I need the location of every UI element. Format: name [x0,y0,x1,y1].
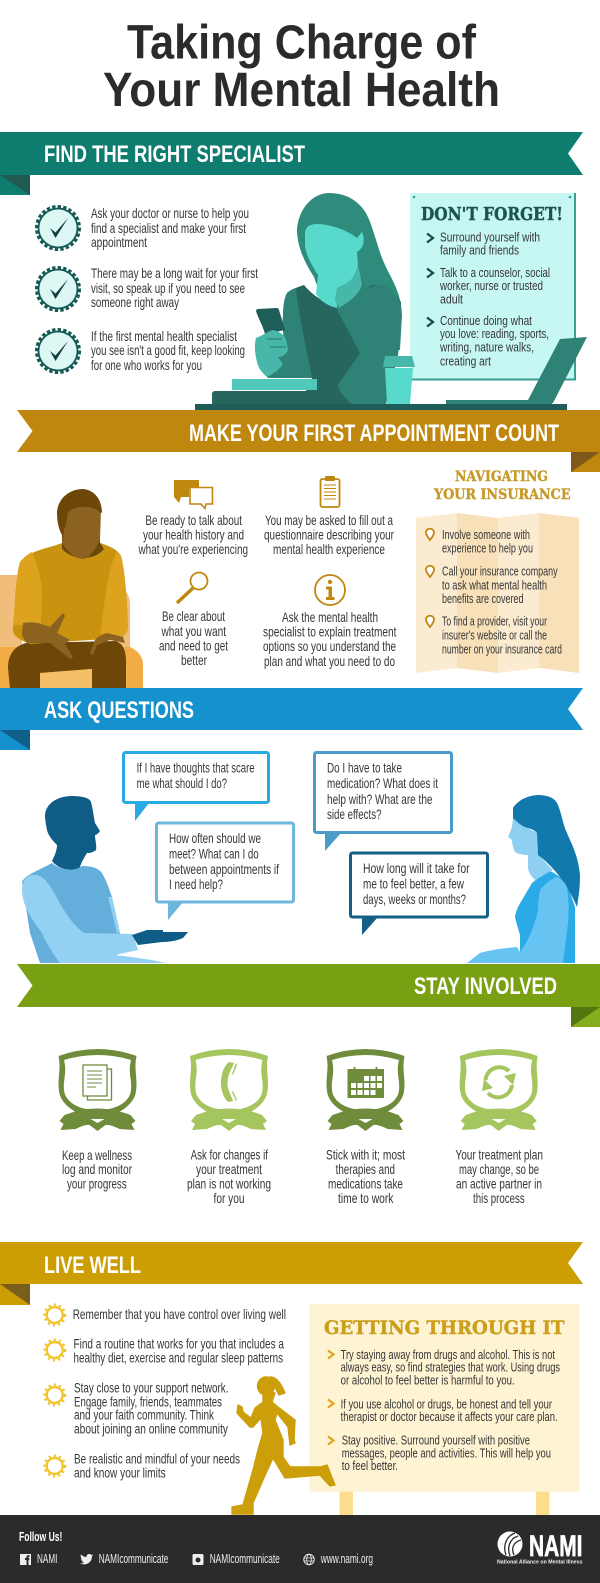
text: tip 1 [91,205,249,250]
text: tip 2: someone right away [91,294,179,310]
list: don't forget items: adult [440,292,463,306]
list: insurance items: to ask what mental health [442,578,547,593]
left arm [262,288,312,378]
icon: shield with documents [58,1049,136,1131]
text: be ready to talk: what you're experiencing [138,541,248,557]
text: realistic: and know your limits [74,1465,166,1481]
torso [22,863,120,963]
icon: clipboard [320,476,340,507]
icon: chat bubbles [174,480,212,508]
icon: shield with calendar [326,1049,404,1131]
speech bubble 3: side effects? [327,806,382,822]
list: insurance items: insurer's website or call the [442,628,547,643]
icon: check badge 1 [36,206,80,250]
banner: stay involved: STAY INVOLVED [414,973,557,1000]
icon: sun 1 [45,1305,64,1325]
checklist: specialist tips [36,205,258,373]
text: tip 1: appointment [91,234,147,250]
speech bubble 4: me to feel better, a few [363,876,465,892]
tip group: appointment tips [138,476,397,669]
face [62,506,101,559]
speech bubble 1: If I have thoughts that scare [137,760,255,776]
banner: make your first appointment count [17,410,600,472]
text: ask for changes: your treatment [196,1161,262,1177]
text: support network: Stay close to your support network. [74,1379,228,1395]
text: tip 3: for one who works for you [91,357,202,373]
banner: live well: LIVE WELL [44,1252,141,1279]
text: be clear [159,608,228,668]
social: twitter: NAMIcommunicate [99,1552,168,1566]
face [305,224,364,288]
text: tip 2: visit, so speak up if you need to see [91,280,245,296]
panel: navigating your insurance [416,469,579,673]
social: twitter [80,1552,168,1566]
text: wellness log [62,1147,132,1192]
speech bubble 3 [314,752,452,851]
text: active partner [455,1146,543,1206]
text: stick with it [326,1146,405,1206]
social: instagram [192,1552,280,1566]
laptop [446,337,587,404]
text: ask about treatment: specialist to explain treatment [263,624,397,640]
text: questionnaire [264,512,394,557]
hands [22,613,73,659]
list: don't forget items: Talk to a counselor, social [440,265,550,280]
speech bubble 2 [156,823,294,920]
hair [57,489,102,535]
text: questionnaire: mental health experience [273,541,385,557]
text: ask for changes: for you [214,1190,244,1206]
couch back [0,575,130,650]
title [103,16,500,117]
speech bubble 3: Do I have to take [327,760,402,776]
list: don't forget items: writing, nature walks, [439,340,534,355]
text: stick with it: medications take [328,1176,403,1192]
hair [513,795,580,907]
head and neck [45,796,100,870]
couch seat [0,647,143,689]
text: tip 1: Ask your doctor or nurse to help you [91,205,249,221]
speech bubble 2: I need help? [169,876,223,892]
text: support network: about joining an online community [74,1421,228,1437]
heading: navigating your insurance: YOUR INSURANCE [433,487,571,503]
heading: don't forget: DON'T FORGET! [421,204,563,225]
icon: info circle [315,575,345,605]
icon: check badge 3 [36,330,80,372]
text: stick with it: Stick with it; most [326,1146,405,1162]
panel: don't forget [410,193,576,380]
text: wellness log: your progress [67,1176,127,1192]
social: instagram: NAMIcommunicate [210,1552,280,1566]
text: stick with it: time to work [338,1190,394,1206]
text: be clear: Be clear about [162,608,225,624]
list: don't forget items: Continue doing what [440,313,532,328]
text: active partner: Your treatment plan [455,1146,543,1162]
social: website [304,1552,373,1566]
right arm and forearm [336,268,401,404]
text: be clear: and need to get [159,638,228,654]
text: be ready to talk [138,512,248,557]
list: insurance items: To find a provider, visit your [442,614,547,629]
neck [316,275,337,308]
icon: shield with refresh arrows [460,1049,538,1131]
text: routine: Find a routine that works for you that includes a [74,1335,284,1351]
illustration: runner silhouette [232,1377,335,1514]
text: routine [74,1335,284,1365]
speech bubble 4: days, weeks or months? [363,891,466,907]
arm [467,877,569,963]
panel: getting through it sign [309,1304,579,1516]
text: ask for changes: Ask for changes if [191,1146,268,1162]
text: stick with it: therapies and [336,1161,395,1177]
illustration: man seated on couch [0,489,143,689]
icon: sun 2 [45,1340,64,1360]
list: insurance items [426,527,562,657]
speech bubble 2: How often should we [169,830,261,846]
hand [132,930,188,945]
title: Your Mental Health [103,64,500,117]
list: getting through it items: to feel better. [342,1458,398,1473]
text: support network: Engage family, friends, teammates [74,1393,222,1409]
speech bubble 3: help with? What are the [327,791,433,807]
list: live well tips [45,1305,286,1481]
phone [256,308,285,334]
neck [62,528,104,558]
text: control: Remember that you have control over living well [73,1306,286,1322]
heading: getting through it: GETTING THROUGH IT [324,1317,564,1339]
torso [283,285,401,404]
logo: NAMI: National Alliance on Mental Illness [497,1560,582,1566]
text: ask for changes [187,1146,271,1206]
list: insurance items: experience to help you [442,541,533,556]
icon: shield with phone [190,1049,268,1131]
speech bubble 4: How long will it take for [363,860,470,876]
list: don't forget items: creating art [440,354,491,369]
legs [8,641,126,689]
list: don't forget items: you love: reading, sports, [440,326,549,341]
text: active partner: an active partner in [456,1176,542,1192]
heading: navigating your insurance [433,469,571,503]
social: facebook [20,1552,57,1566]
illustration: woman listening [467,795,580,963]
icon: check badge 2 [36,268,80,310]
text: be clear: better [181,652,207,668]
banner: find the right specialist [0,132,583,195]
illustration: man gesturing [22,796,188,963]
speech bubble 2: between appointments if [169,861,279,877]
hand with phone [255,330,288,377]
speech bubble 3: medication? What does it [327,775,438,791]
text: questionnaire: You may be asked to fill out a [265,512,393,528]
social: website: www.nami.org [320,1552,373,1566]
heading: navigating your insurance: NAVIGATING [455,469,548,485]
banner: stay involved [17,964,600,1027]
text: realistic: Be realistic and mindful of your needs [74,1451,240,1467]
text: ask about treatment: plan and what you need to do [264,653,395,669]
text: follow us: Follow Us! [19,1529,62,1544]
title: Taking Charge of [127,16,477,70]
social: facebook: NAMI [37,1552,57,1566]
books [232,379,317,390]
text: tip 1: find a specialist and make your first [91,220,246,236]
text: tip 2: There may be a long wait for your first [91,265,258,281]
torso [515,870,575,963]
list: getting through it items: Stay positive. Surround yourself with positive [342,1432,530,1447]
text: wellness log: Keep a wellness [62,1147,132,1163]
folded map [416,513,579,673]
text: active partner: this process [473,1190,525,1206]
list: getting through it items [328,1347,560,1473]
list: don't forget items: worker, nurse or trusted [439,278,543,293]
speech bubble 1 [124,752,268,821]
arms [13,552,128,638]
torso [13,543,128,644]
text: be clear: what you want [161,623,226,639]
text: realistic [74,1451,240,1481]
desk [195,404,567,410]
text: support network: and your faith community. Think [74,1407,215,1423]
text: ask about treatment: Ask the mental health [282,609,378,625]
text: routine: healthy diet, exercise and regular sleep patterns [74,1349,283,1365]
text: active partner: may change, so be [459,1161,539,1177]
coffee cup [385,368,413,404]
face and neck [508,817,553,880]
speech bubble 2: meet? What can I do [169,846,259,862]
list: don't forget items [427,230,550,369]
hair [297,193,402,350]
list: don't forget items: Surround yourself with [440,230,540,245]
text: be ready to talk: your health history and [143,526,244,542]
list: insurance items: benefits are covered [442,591,524,606]
text: ask about treatment: options so you understand the [263,638,396,654]
icon: sun 4 [45,1456,64,1476]
icon: sun 3 [45,1385,64,1405]
logo: NAMI [497,1530,582,1566]
text: ask about treatment [263,609,397,669]
speech bubble 1: me what should I do? [137,775,227,791]
banner: ask questions: ASK QUESTIONS [44,697,194,724]
banner: live well [0,1242,583,1305]
list: don't forget items: family and friends [440,242,519,258]
list: getting through it items: or alcohol to feel better is harmful to you. [341,1373,515,1388]
text: ask for changes: plan is not working [187,1176,271,1192]
text: support network [74,1379,228,1437]
icon: magnifier [177,572,208,603]
hand at chin [335,266,362,308]
text: be ready to talk: Be ready to talk about [145,512,242,528]
arm [22,875,165,963]
illustration: woman at desk with phone [195,193,587,410]
banner: find the right specialist: FIND THE RIGHT SPECIALIST [44,141,305,168]
text: tip 3: you see isn't a good fit, keep looking [91,342,245,358]
text: tip 3 [91,328,245,373]
text: tip 2 [91,265,258,310]
footer [0,1515,600,1583]
text: tip 3: If the first mental health specialist [91,328,237,344]
banner: ask questions [0,688,583,750]
list: insurance items: Involve someone with [442,527,530,542]
text: questionnaire: questionnaire describing your [264,526,394,542]
speech bubble 4 [350,853,488,935]
text: wellness log: log and monitor [62,1161,132,1177]
